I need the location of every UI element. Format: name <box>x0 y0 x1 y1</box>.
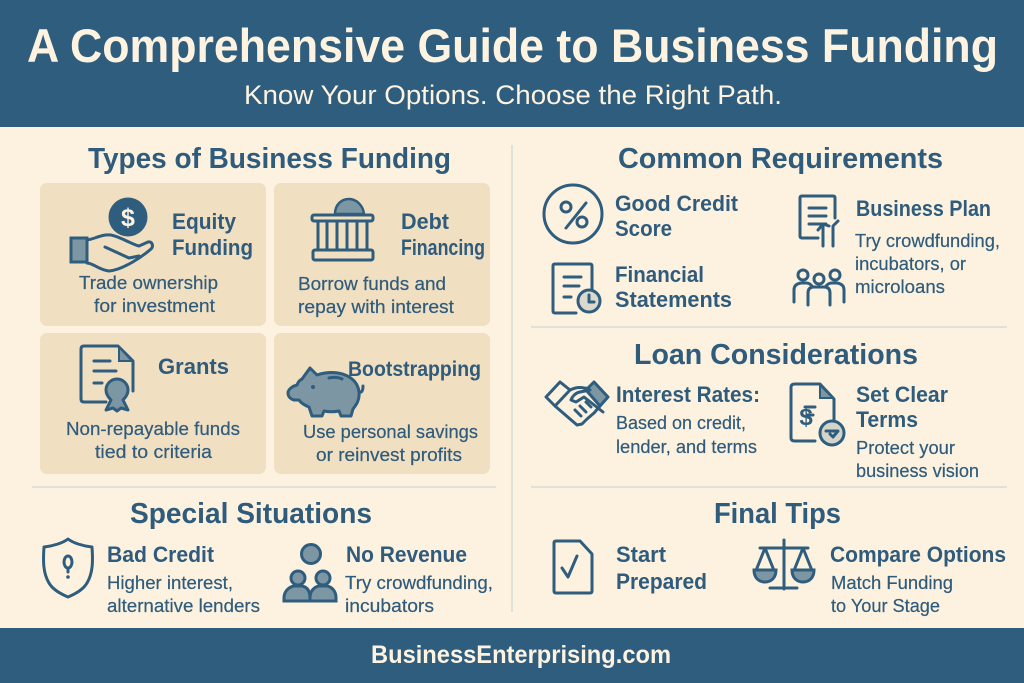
item: start prepared <box>554 541 707 594</box>
item: financial statements <box>553 262 732 313</box>
card: grants <box>40 333 266 474</box>
icon: checklist document <box>554 541 592 593</box>
heading: special situations: Special Situations <box>130 498 372 530</box>
panel: types of business funding <box>40 143 490 474</box>
item: set clear terms: Protect your <box>856 437 955 458</box>
subtitle: Know Your Options. Choose the Right Path. <box>244 80 782 110</box>
icon: group of people <box>284 544 336 601</box>
icon: balance scale <box>754 540 814 589</box>
item: bad credit: Bad Credit <box>107 542 215 567</box>
item: set clear terms: Terms <box>856 407 918 432</box>
title: A Comprehensive Guide to Business Funding <box>27 19 998 72</box>
heading: final tips: Final Tips <box>714 498 841 530</box>
item: good credit score: Score <box>615 216 672 241</box>
item: interest rates <box>546 382 760 457</box>
footer banner <box>0 628 1024 683</box>
card: debt financing: Borrow funds and <box>298 273 446 294</box>
item: business plan <box>800 196 1000 297</box>
item: set clear terms: Set Clear <box>856 382 948 407</box>
panel: special situations <box>44 498 493 616</box>
icon: hand holding coin: $ <box>121 204 135 232</box>
item: financial statements: Statements <box>615 287 732 312</box>
icon: percent circle <box>544 185 602 243</box>
icon: document with badge <box>791 384 844 445</box>
item: start prepared: Prepared <box>616 569 707 594</box>
heading: loan considerations: Loan Considerations <box>634 339 918 371</box>
card: grants: tied to criteria <box>95 441 213 462</box>
card: bootstrapping <box>274 333 490 474</box>
item: compare options: Compare Options <box>830 542 1006 567</box>
item: interest rates: Interest Rates: <box>616 382 760 407</box>
icon: bank building <box>312 199 373 260</box>
item: bad credit: Higher interest, <box>107 572 233 593</box>
item: business plan: incubators, or <box>855 253 966 274</box>
panel: final tips <box>554 498 1006 616</box>
item: bad credit: alternative lenders <box>107 595 260 616</box>
item: business plan: Business Plan <box>856 196 991 221</box>
item: business plan: microloans <box>855 276 945 297</box>
item: business plan: Try crowdfunding, <box>855 230 1000 251</box>
icon: document with seal <box>81 346 133 411</box>
card: bootstrapping: Use personal savings <box>303 421 478 442</box>
panel: loan considerations <box>546 339 979 481</box>
item: no revenue <box>284 542 493 616</box>
card: bootstrapping: or reinvest profits <box>316 444 462 465</box>
item: set clear terms <box>791 382 979 481</box>
item: compare options: to Your Stage <box>831 595 940 616</box>
card: equity funding: Funding <box>172 235 253 260</box>
item: start prepared: Start <box>616 542 667 567</box>
item: good credit score <box>544 185 739 243</box>
card: equity funding <box>40 183 266 326</box>
card: grants: Grants <box>158 354 229 379</box>
icon: hand holding coin <box>71 198 152 271</box>
footer banner: BusinessEnterprising.com <box>371 641 671 669</box>
card: equity funding: for investment <box>94 295 215 316</box>
icon: shield <box>44 539 92 597</box>
card: bootstrapping: Bootstrapping <box>348 358 481 381</box>
icon: business plan document <box>800 196 838 246</box>
heading: common requirements: Common Requirements <box>618 143 943 175</box>
header banner <box>0 0 1024 127</box>
item: interest rates: lender, and terms <box>616 436 757 457</box>
icon: document with badge: $ <box>799 404 813 431</box>
item: compare options <box>754 540 1006 616</box>
icon: piggy bank <box>288 368 363 416</box>
card: debt financing <box>274 183 490 326</box>
card: equity funding: Equity <box>172 209 237 234</box>
card: grants: Non-repayable funds <box>66 418 240 439</box>
icon: statement with clock <box>553 264 600 313</box>
item: set clear terms: business vision <box>856 460 979 481</box>
card: debt financing: Debt <box>401 209 450 234</box>
item: good credit score: Good Credit <box>615 191 739 216</box>
item: no revenue: Try crowdfunding, <box>345 572 493 593</box>
card: debt financing: repay with interest <box>298 296 454 317</box>
item: financial statements: Financial <box>615 262 704 287</box>
item: interest rates: Based on credit, <box>616 412 746 433</box>
item: compare options: Match Funding <box>831 572 953 593</box>
card: equity funding: Trade ownership <box>79 272 218 293</box>
item: no revenue: No Revenue <box>346 542 467 567</box>
icon: three people <box>794 270 844 305</box>
item: bad credit <box>44 539 260 616</box>
card: debt financing: Financing <box>401 235 485 260</box>
icon: handshake <box>546 382 608 425</box>
heading: types of business funding: Types of Business Funding <box>88 143 451 175</box>
item: no revenue: incubators <box>345 595 434 616</box>
panel: common requirements <box>544 143 1000 313</box>
